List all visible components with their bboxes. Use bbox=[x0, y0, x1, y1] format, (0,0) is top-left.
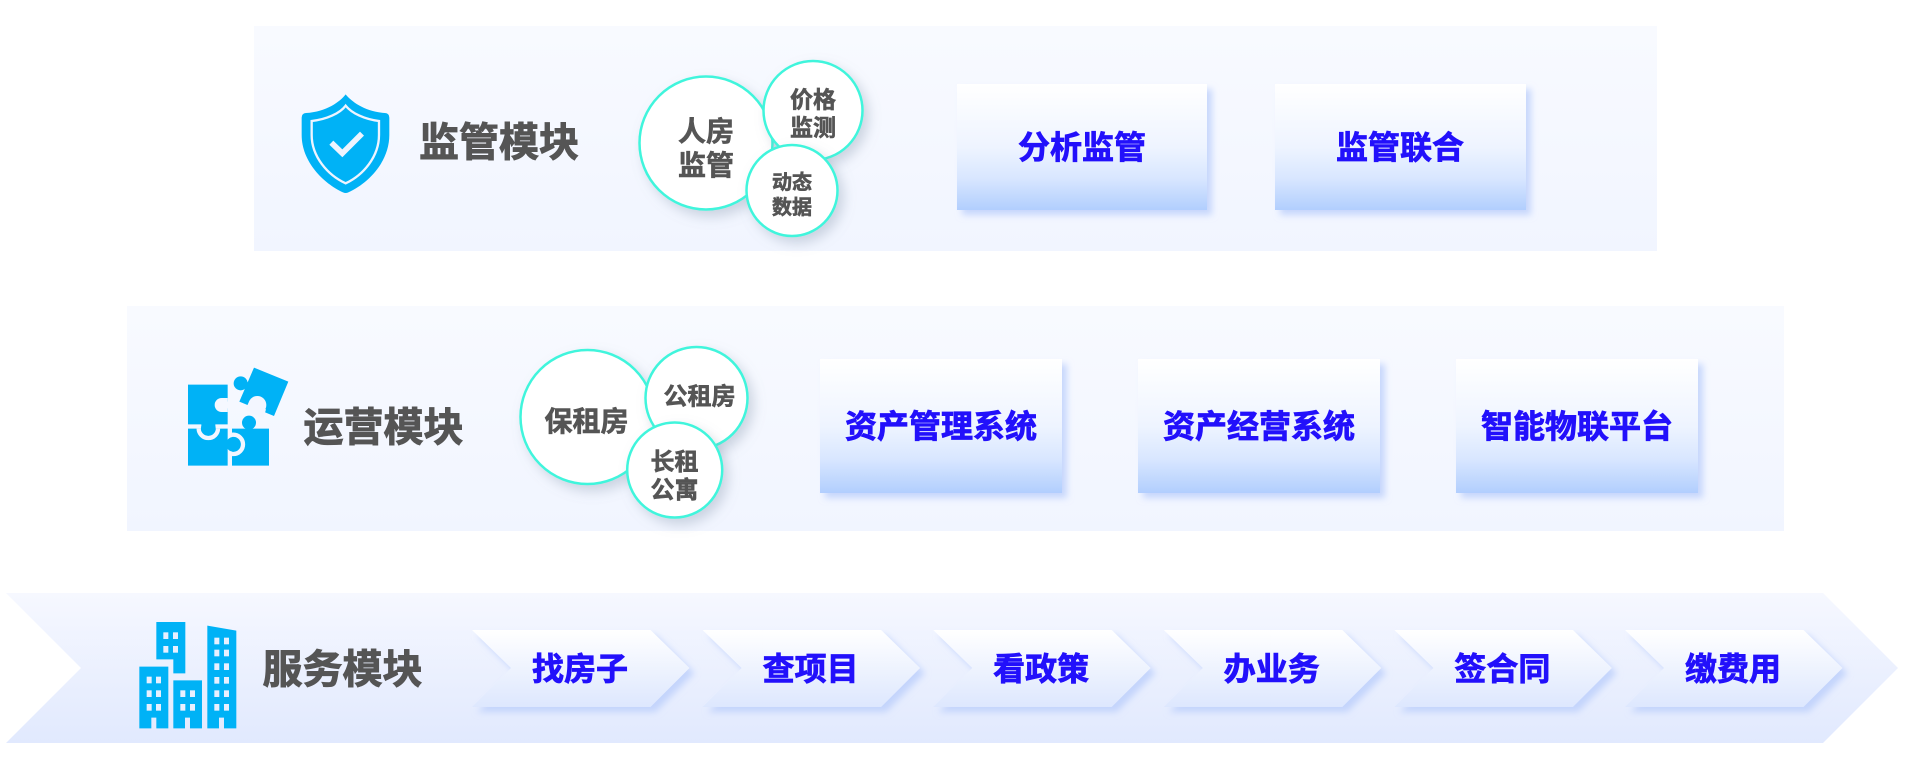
circle: 保租房: 保租房 bbox=[544, 406, 629, 437]
chevron: 缴费用 bbox=[1625, 630, 1842, 707]
circle: 动态数据: 数据 bbox=[772, 196, 812, 219]
box: 资产管理系统: 资产管理系统 bbox=[845, 408, 1037, 444]
icon: buildings bbox=[139, 622, 236, 728]
box: 分析监管: 分析监管 bbox=[1018, 130, 1146, 166]
circle: 长租公寓 bbox=[627, 422, 722, 518]
chevron: 找房子 bbox=[472, 630, 690, 707]
circle: 价格监测: 监测 bbox=[790, 114, 836, 140]
box: 监管联合 bbox=[1275, 84, 1526, 210]
panel: 运营模块 bbox=[127, 338, 1784, 531]
chevron: 办业务: 办业务 bbox=[1224, 651, 1320, 687]
chevron: 查项目 bbox=[703, 630, 920, 707]
circle: 人房监管: 监管 bbox=[678, 150, 734, 181]
chevron: 缴费用: 缴费用 bbox=[1685, 651, 1781, 687]
circle: 长租公寓: 公寓 bbox=[650, 477, 698, 504]
box: 资产经营系统 bbox=[1138, 359, 1380, 493]
box: 资产经营系统: 资产经营系统 bbox=[1163, 408, 1355, 444]
heading: 监管模块: 监管模块 bbox=[419, 121, 579, 165]
heading: 服务模块: 服务模块 bbox=[262, 648, 422, 692]
circle: 人房监管 bbox=[640, 76, 772, 210]
heading: 运营模块: 运营模块 bbox=[304, 406, 464, 450]
circle: 公租房: 公租房 bbox=[664, 384, 736, 410]
box: 资产管理系统 bbox=[820, 359, 1062, 493]
panel: 服务模块 arrow band bbox=[6, 593, 1898, 743]
box: 智能物联平台 bbox=[1456, 359, 1698, 493]
circle: 动态数据: 动态 bbox=[772, 170, 812, 194]
circle: 公租房 bbox=[646, 347, 748, 449]
box: 智能物联平台: 智能物联平台 bbox=[1481, 408, 1673, 444]
icon: puzzle bbox=[188, 368, 288, 466]
chevron: 找房子: 找房子 bbox=[532, 651, 628, 687]
panel: 监管模块 bbox=[254, 26, 1657, 251]
icon: shield bbox=[302, 94, 389, 193]
chevron: 办业务 bbox=[1164, 630, 1381, 707]
circle: 价格监测: 价格 bbox=[790, 86, 836, 112]
circle: 保租房 bbox=[520, 350, 654, 484]
box: 监管联合: 监管联合 bbox=[1336, 130, 1464, 166]
circle: 动态数据 bbox=[746, 145, 838, 236]
chevron: 签合同: 签合同 bbox=[1454, 651, 1550, 687]
box: 分析监管 bbox=[957, 84, 1207, 210]
circle: 价格监测 bbox=[764, 61, 862, 160]
circle: 长租公寓: 长租 bbox=[650, 449, 698, 476]
chevron: 看政策 bbox=[933, 630, 1151, 707]
chevron: 签合同 bbox=[1394, 630, 1612, 707]
circle: 人房监管: 人房 bbox=[678, 116, 734, 147]
chevron: 看政策: 看政策 bbox=[993, 651, 1089, 687]
chevron: 查项目: 查项目 bbox=[763, 651, 859, 687]
